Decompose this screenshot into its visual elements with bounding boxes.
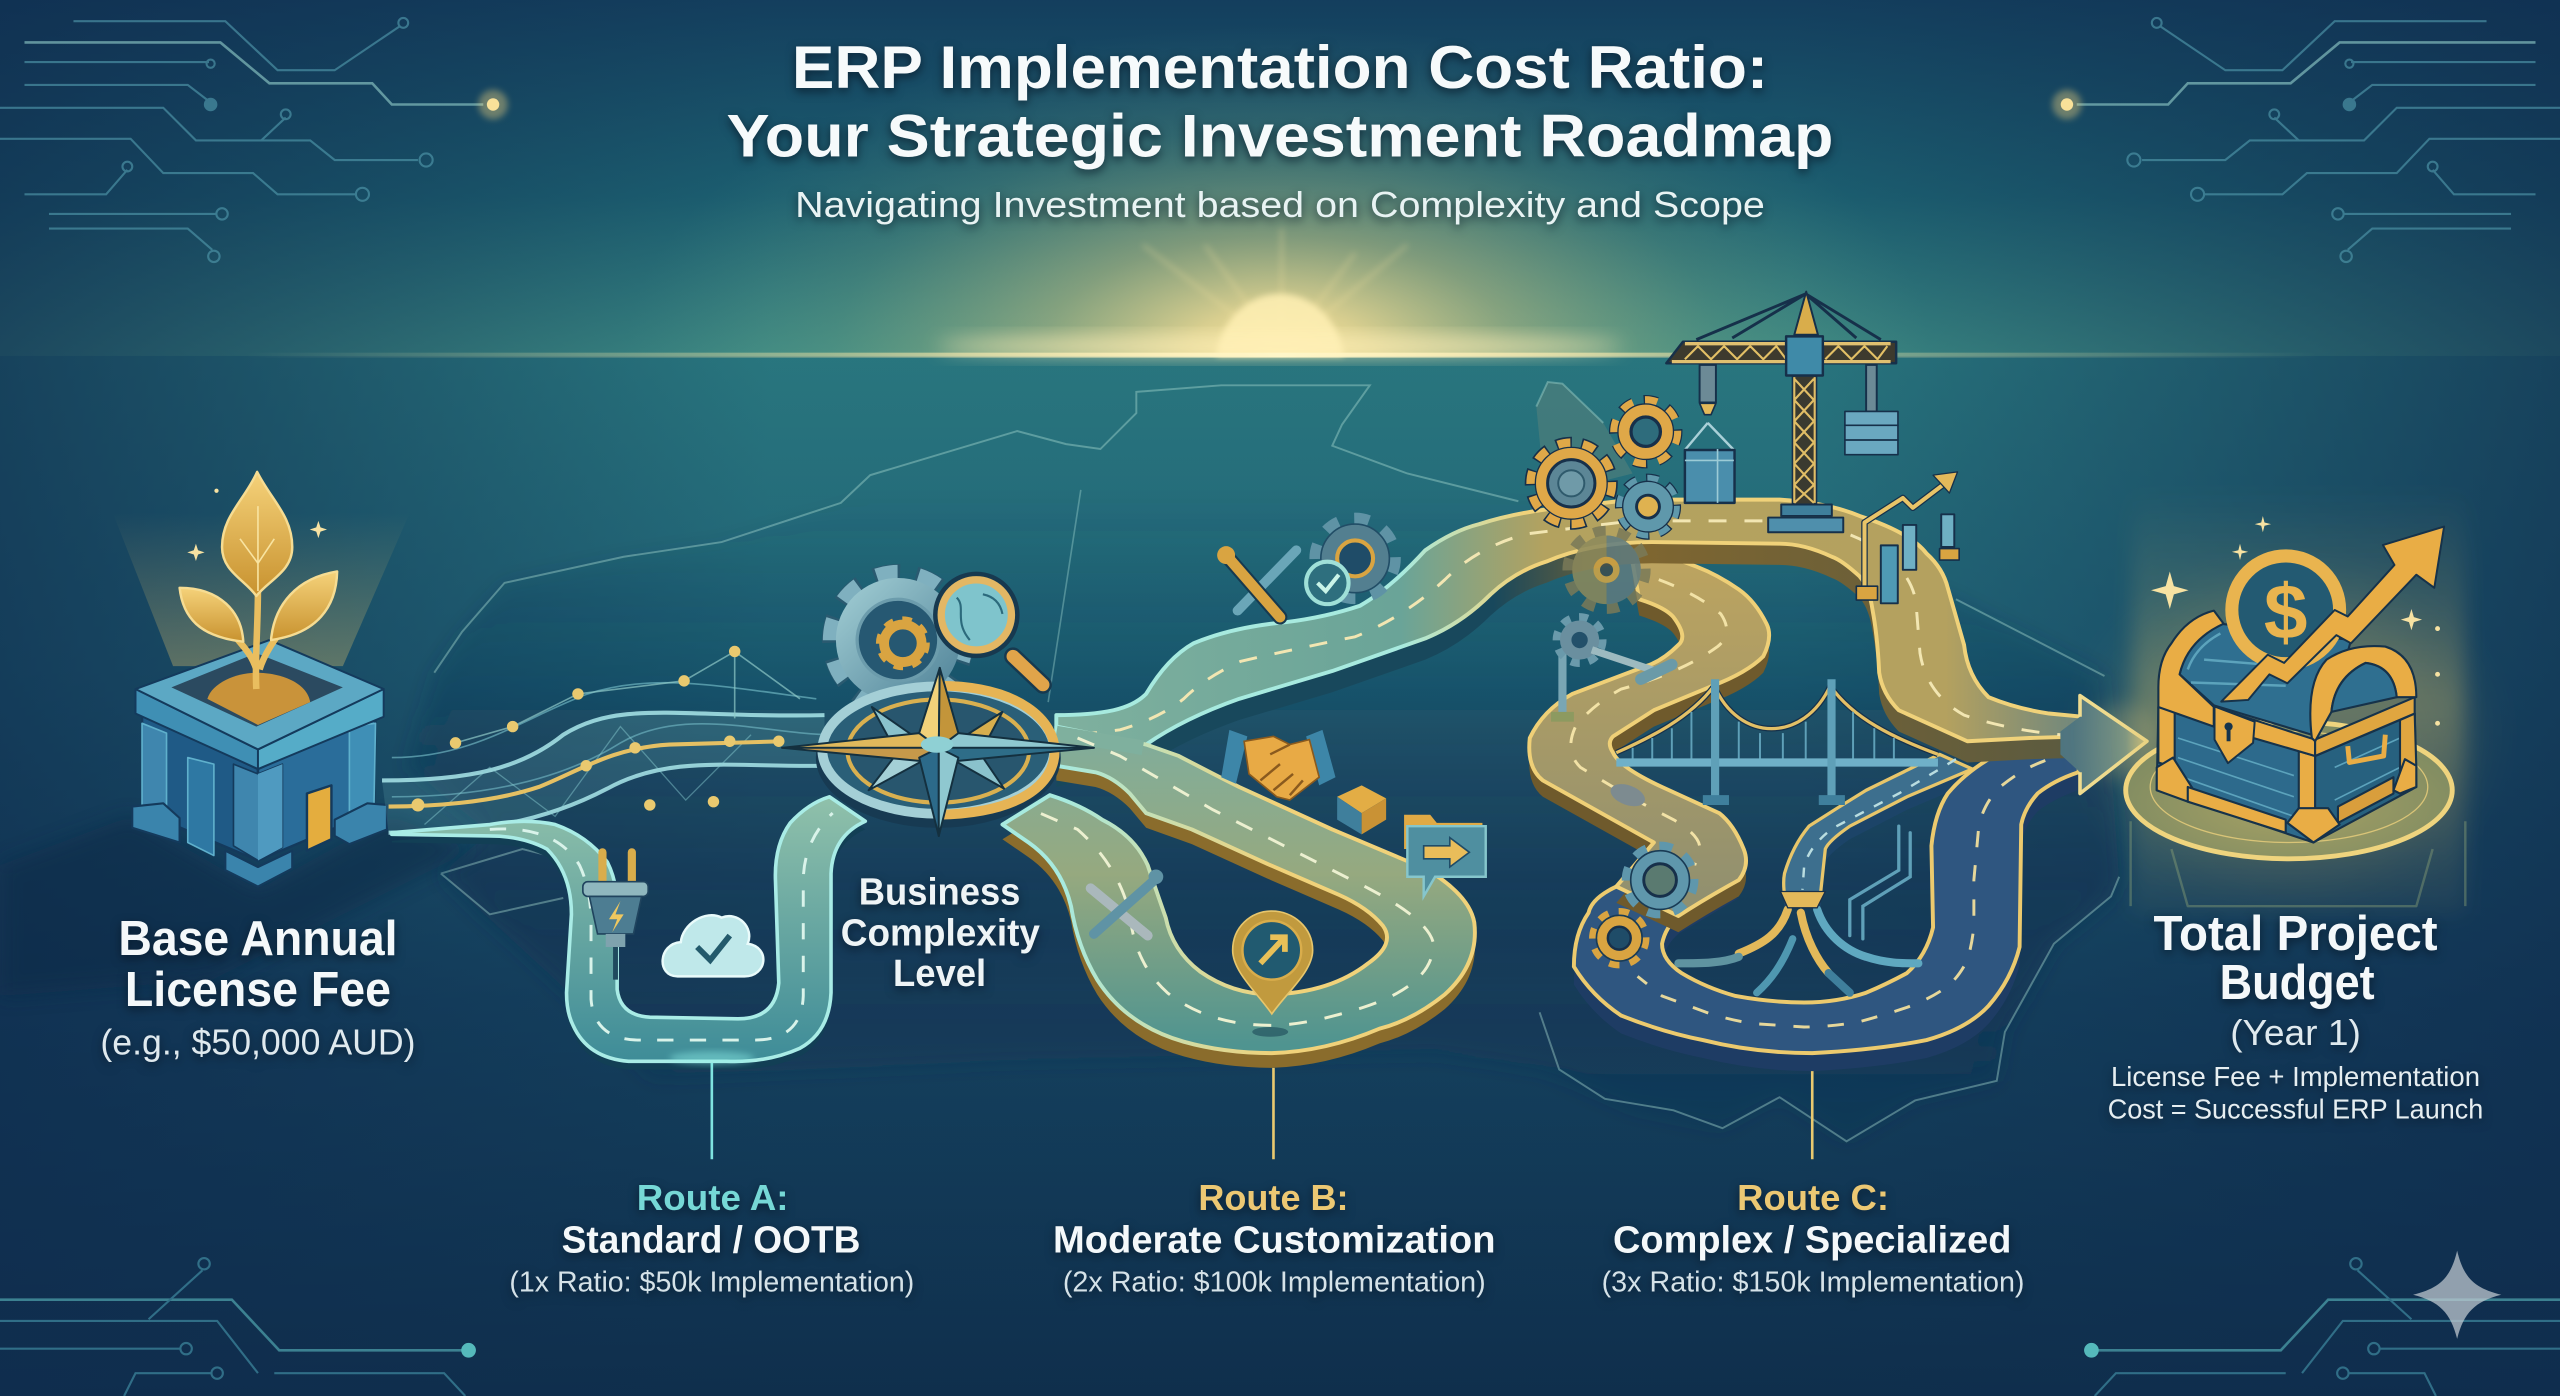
icon: small box [1337,785,1386,834]
title: Your Strategic Investment Roadmap [727,102,1833,170]
sunrise over the horizon [245,0,2318,358]
label: Route C: Complex / Specialized [1613,1218,2011,1260]
decoration: glowing dot bottom-right [2084,1343,2099,1358]
leader line: Route A [669,1051,754,1159]
coin [2232,556,2340,664]
label: Route C: (3x Ratio: $150k Implementation) [1602,1267,2024,1299]
label: Route A: (1x Ratio: $50k Implementation) [509,1267,914,1299]
decoration: glowing dot top-right [2052,90,2082,119]
title [727,33,1833,170]
icon: compass [782,668,1094,836]
icon: gear and magnifying glass [831,572,1043,707]
label: Route B: (2x Ratio: $100k Implementation) [1063,1267,1486,1299]
label: business complexity level: Complexity [841,911,1040,953]
icon: crane [1666,292,1898,532]
icon: location pin [1233,911,1313,1014]
label: business complexity level: Level [893,952,986,994]
icon: treasure chest with coin and arrow [2109,490,2469,914]
label: total project budget [2108,907,2483,1124]
icon: robot arm [1551,617,1672,722]
label: total project budget: Budget [2220,956,2375,1010]
map outline: Australia [408,382,2119,1141]
label: base annual license fee: Base Annual [118,912,398,966]
leader line: Route B [1272,1068,1274,1159]
label: Route C: Route C: [1737,1177,1889,1218]
growth arrow [2221,527,2444,702]
icon: base building with growing plant [0,472,473,996]
label: Route A: Route A: [637,1177,789,1218]
icon: small rock on road [1608,780,1648,810]
decoration: glowing dot bottom-left [461,1343,476,1358]
icon: cloud with check [663,915,763,976]
icon: cable clamp and pipes [1678,826,1918,993]
label: Route B: Moderate Customization [1053,1218,1496,1260]
icon: gear with check [1306,519,1394,604]
icon: gold and teal gears [1531,401,1677,534]
road: Route A [392,797,865,1070]
chest lid [2158,611,2416,756]
data streams from building to compass [382,646,833,833]
icon: wrench and screwdriver [1217,546,1296,617]
icon: plug [583,852,648,980]
label: base annual license fee: (e.g., $50,000 AUD) [100,1022,416,1063]
label: Route B: Route B: [1198,1177,1349,1218]
coin: $ [2264,567,2308,655]
label: base annual license fee [100,912,416,1063]
label: total project budget: License Fee + Implementation [2111,1061,2480,1092]
icon: folder with arrow [1404,815,1486,896]
label: total project budget: Total Project [2153,907,2438,961]
road: Route C lower navy loop [1574,736,2083,1071]
decoration: circuit lines bottom-right [2095,1258,2560,1396]
label: Route C [1602,1177,2024,1299]
decoration: circuit lines top-left [0,18,483,262]
watermark star [2413,1251,2501,1339]
icon: suspension bridge [1616,679,1938,800]
icon: handshake [1221,730,1336,800]
road: Route C navy branch [1784,754,1972,908]
label: total project budget: (Year 1) [2230,1012,2361,1053]
icon: arrow head into budget [2060,696,2162,794]
icon: crossed tools on Route B [1091,869,1163,936]
icon: growth chart [1856,472,1959,603]
label: total project budget: Cost = Successful ERP Launch [2108,1093,2483,1124]
leader line: Route C [1811,1071,1813,1159]
icon: lower gears [1593,847,1693,964]
label: Route A: Standard / OOTB [562,1218,860,1260]
decoration: glowing dot top-left [478,90,508,119]
chest handle [2348,735,2385,762]
sparkles [2151,516,2440,726]
icon: plant [180,472,337,689]
road: Route C gold winding [1529,552,1769,932]
label: business complexity level: Business [859,871,1020,913]
icon: faded gear on road [1569,532,1644,607]
decoration: circuit lines top-right [2077,18,2560,262]
label: business complexity level [841,871,1040,994]
road: Route B [1002,727,1475,1068]
label: Route A [509,1177,914,1299]
decoration: circuit lines bottom-left [0,1258,465,1396]
chest body [2157,707,2416,842]
title: ERP Implementation Cost Ratio: [792,33,1768,101]
road: Route C upper over plateau to arrow [1056,500,2083,787]
subtitle: Navigating Investment based on Complexity and Scope [795,184,1765,225]
label: Route B [1053,1177,1496,1299]
label: base annual license fee: License Fee [125,963,391,1017]
lock [2215,706,2255,763]
